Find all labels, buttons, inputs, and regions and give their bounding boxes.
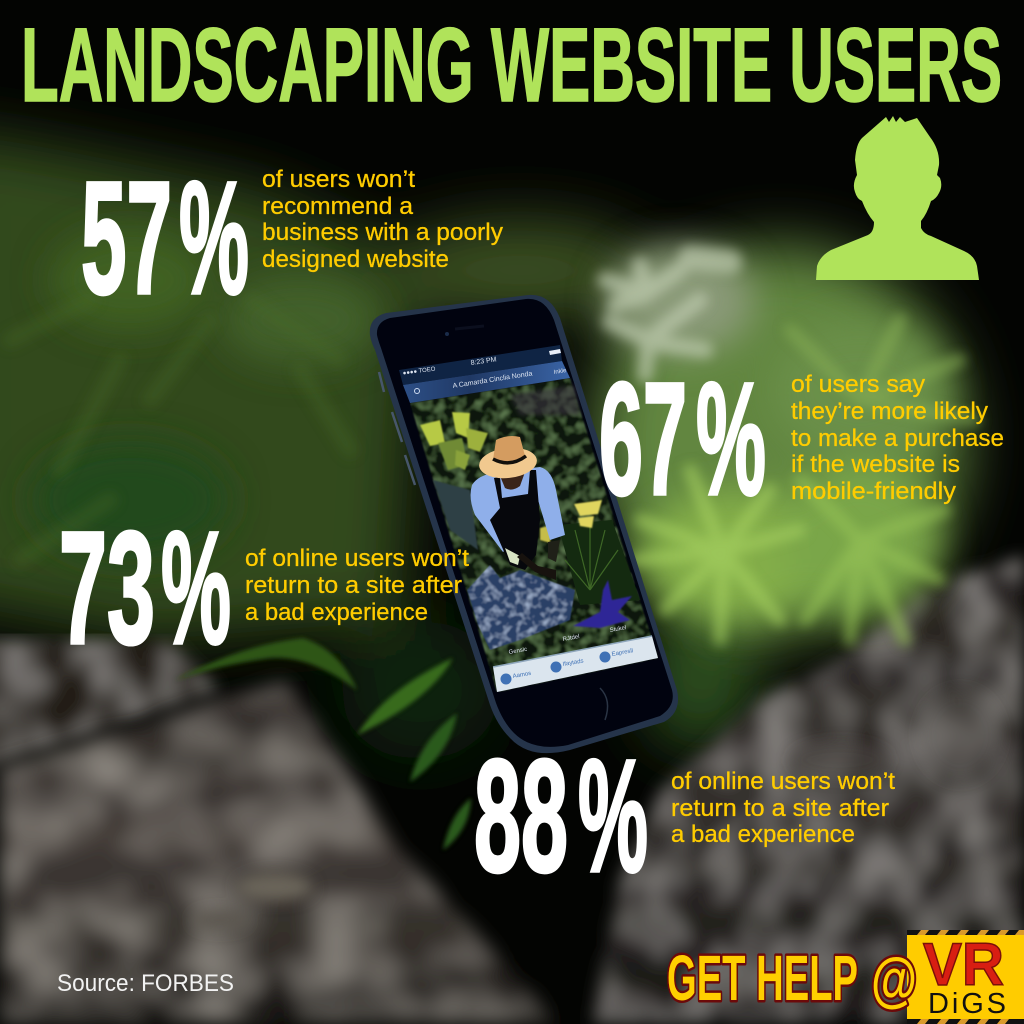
- description 67%: [791, 371, 1004, 505]
- phone speaker: [455, 326, 484, 329]
- logo: VR Digs: [907, 930, 1024, 1024]
- phone mockup: [370, 295, 678, 753]
- screen: Gensic: [508, 647, 528, 656]
- number 88%: 88: [474, 726, 568, 905]
- stat: 67%: [599, 349, 1004, 528]
- description 57%: recommend a: [262, 193, 414, 220]
- description 67%: to make a purchase: [791, 425, 1004, 452]
- shirt: [471, 467, 565, 552]
- stat: 73%: [59, 498, 469, 677]
- stat: 88%: %: [578, 726, 648, 905]
- screen: Aamos: [512, 671, 532, 680]
- description 67%: of users say: [791, 371, 925, 398]
- hat: [478, 436, 538, 481]
- number 73%: 73: [59, 498, 155, 677]
- description 73%: a bad experience: [245, 599, 428, 626]
- icon: user silhouette: [816, 116, 979, 280]
- number 57%: 57: [81, 148, 172, 327]
- call to action: GET HELP: [667, 942, 858, 1014]
- screen: ●●●● TOEO: [402, 366, 436, 377]
- yellow foliage: [420, 412, 602, 543]
- face: [500, 472, 525, 490]
- description 73%: return to a site after: [245, 572, 462, 599]
- plants: [30, 230, 950, 620]
- call to action: @: [871, 946, 917, 1013]
- phone body: [370, 295, 678, 753]
- screen: [399, 345, 658, 692]
- screen: 8:23 PM: [470, 356, 497, 367]
- description 88%: of online users won’t: [671, 768, 895, 795]
- timber: [0, 640, 220, 770]
- dark left leaves: [433, 480, 478, 550]
- screen: Eapresll: [611, 648, 634, 658]
- screen: RJtdel: [562, 634, 580, 643]
- description 88%: a bad experience: [671, 821, 855, 848]
- description 88%: return to a site after: [671, 795, 889, 822]
- gloves: [505, 548, 520, 565]
- description 88%: [671, 768, 895, 848]
- logo DiGS: DiGS: [928, 988, 1006, 1020]
- white flowers: [605, 258, 730, 375]
- hazard stripes: [907, 930, 1024, 935]
- description 67%: mobile-friendly: [791, 478, 956, 505]
- description 67%: if the website is: [791, 451, 960, 478]
- screen: Ifaytads: [562, 658, 584, 668]
- stat: 88%: [474, 726, 895, 905]
- stat: 57%: %: [179, 148, 249, 327]
- fern: [558, 520, 640, 605]
- number 67%: 67: [599, 349, 687, 528]
- screen: Inkle: [553, 368, 567, 376]
- description 57%: business with a poorly: [262, 219, 503, 246]
- tab bar: [493, 636, 658, 692]
- stat: 57%: [81, 148, 503, 327]
- blue foliage: [467, 565, 632, 650]
- description 73%: of online users won’t: [245, 545, 469, 572]
- soft foliage mass: [0, 130, 965, 760]
- source note: Source: FORBES: [57, 970, 234, 997]
- apron: [490, 470, 540, 570]
- status bar: [399, 345, 562, 385]
- screen: Stukel: [609, 625, 627, 634]
- description 57%: [262, 166, 503, 273]
- home button: [600, 688, 608, 720]
- description 73%: [245, 545, 469, 626]
- gardener: [471, 436, 565, 580]
- nav bar: [403, 361, 570, 403]
- sharp green leaves: [175, 638, 471, 850]
- description 57%: designed website: [262, 246, 449, 273]
- garden photo: [410, 378, 658, 692]
- purple flower: [573, 580, 632, 628]
- description 67%: they’re more likely: [791, 398, 988, 425]
- logo VR: VR: [923, 931, 1004, 998]
- screen: A Camarda Cinclia Nonda: [452, 370, 533, 390]
- description 57%: of users won’t: [262, 166, 415, 193]
- trowel: [517, 553, 556, 580]
- stat: 73%: %: [161, 498, 231, 677]
- stat: 67%: %: [696, 349, 766, 528]
